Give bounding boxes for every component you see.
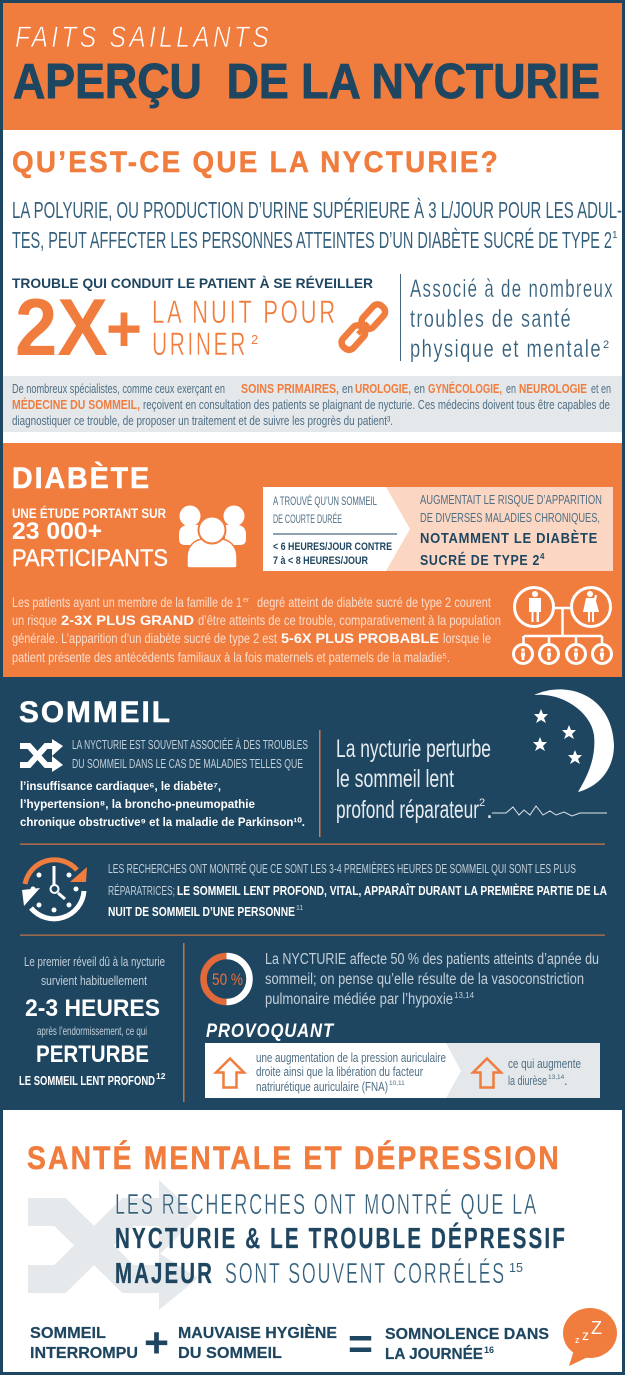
text: first awakening: après l’endormissement, ce qui xyxy=(37,1024,147,1038)
icon: clock with cycle arrows xyxy=(22,860,87,919)
text: nycturia disturbs sleep: le sommeil lent xyxy=(336,765,454,793)
text: first awakening: PERTURBE xyxy=(36,1041,149,1068)
heading: SOMMEIL xyxy=(19,696,172,729)
text: first awakening: 12 xyxy=(156,1071,166,1081)
callout: consequences xyxy=(205,1043,600,1098)
text: associated sleep disorders xyxy=(20,737,308,829)
specialists band xyxy=(3,376,622,432)
equation xyxy=(30,1319,549,1367)
text: research correlation xyxy=(115,1188,567,1290)
text: first hours of sleep: 11 xyxy=(296,905,303,912)
text: first hours of sleep: NUIT DE SOMMEIL D’UNE PERSONNE xyxy=(108,904,295,919)
icon: speech bubble zzz: z xyxy=(582,1327,589,1343)
specialists band: De nombreux spécialistes, comme ceux exerçant en xyxy=(12,381,225,396)
text: family history: lorsque le xyxy=(443,630,491,646)
definition text xyxy=(12,197,622,253)
specialists band: UROLOGIE, xyxy=(355,381,411,396)
callout: short sleep study: DE COURTE DURÉE xyxy=(273,511,342,526)
text: la nuit pour uriner: LA NUIT POUR xyxy=(152,294,338,330)
icon: moon and stars xyxy=(533,689,614,792)
specialists band: MÉDECINE DU SOMMEIL, xyxy=(12,397,140,412)
specialists band: SOINS PRIMAIRES, xyxy=(241,381,339,396)
callout: short sleep study: SUCRÉ DE TYPE 2 xyxy=(420,552,540,569)
callout: consequences: une augmentation de la pression auriculaire xyxy=(256,1050,446,1065)
text: family history: 2-3X PLUS GRAND xyxy=(61,612,194,628)
callout: consequences: 13,14 xyxy=(548,1074,565,1081)
equation: MAUVAISE HYGIÈNE xyxy=(178,1323,337,1342)
text: associé à de nombreux troubles: 2 xyxy=(603,339,609,351)
specialists band: GYNÉCOLOGIE, xyxy=(428,381,502,396)
text: family history: er xyxy=(243,597,250,604)
text: family history: d’être atteints de ce trouble, comparativement à la population xyxy=(198,612,501,628)
text: associated sleep disorders: LA NYCTURIE EST SOUVENT ASSOCIÉE À DES TROUBLES xyxy=(72,737,308,752)
stat: 23 000+ participants: PARTICIPANTS xyxy=(12,545,168,572)
big stat: 2X+: 2X xyxy=(15,283,108,373)
stat: 23 000+ participants xyxy=(12,506,168,572)
specialists band: en xyxy=(414,381,425,396)
heading: DIABÈTE xyxy=(12,461,151,495)
text: family history xyxy=(12,594,501,665)
specialists band: NEUROLOGIE xyxy=(519,381,587,396)
equation: DU SOMMEIL xyxy=(178,1345,282,1362)
specialists band: diagnostiquer ce trouble, de proposer un traitement et de suivre les progrès du patient³. xyxy=(12,413,393,428)
icon: speech bubble zzz: z xyxy=(575,1335,580,1345)
equation: LA JOURNÉE xyxy=(385,1344,483,1363)
text: sleep apnea xyxy=(265,951,599,1008)
icon: up arrow xyxy=(216,1058,244,1088)
equation: + xyxy=(144,1319,169,1366)
text: first awakening: 2-3 HEURES xyxy=(25,995,160,1022)
stat: 23 000+ participants: 23 000+ xyxy=(12,518,102,545)
callout: short sleep study: 4 xyxy=(540,552,545,561)
heading: QU’EST-CE QUE LA NYCTURIE? xyxy=(12,146,500,179)
text: nycturia disturbs sleep: . xyxy=(486,796,493,824)
text: first awakening: survient habituellement xyxy=(41,973,147,988)
icon: chain xyxy=(339,302,388,352)
callout: short sleep study: A TROUVÉ QU’UN SOMMEIL xyxy=(273,493,377,508)
panel: diabète xyxy=(3,443,622,677)
heading: SANTÉ MENTALE ET DÉPRESSION xyxy=(27,1140,561,1176)
text: associated sleep disorders: l’insuffisance cardiaque⁶, le diabète⁷, xyxy=(20,781,221,793)
specialists band: en xyxy=(506,381,516,396)
callout: consequences: 10,11 xyxy=(389,1080,405,1087)
text: family history: Les patients ayant un membre de la famille de 1 xyxy=(12,594,242,610)
callout: consequences: droite ainsi que la libération du facteur xyxy=(256,1064,424,1079)
text: family history: 5-6X PLUS PROBABLE xyxy=(281,630,439,646)
text: associé à de nombreux troubles xyxy=(410,275,614,363)
equation: SOMNOLENCE DANS xyxy=(385,1326,549,1343)
equation: 16 xyxy=(484,1345,494,1355)
definition text: 1 xyxy=(612,230,618,241)
kicker: faits saillants: FAITS SAILLANTS xyxy=(15,21,272,54)
text: research correlation: 15 xyxy=(509,1260,523,1275)
panel: santé mentale et dépression xyxy=(3,1110,622,1372)
text: la nuit pour uriner: URINER xyxy=(152,326,248,362)
callout: consequences: ce qui augmente xyxy=(508,1056,581,1071)
text: first awakening: LE SOMMEIL LENT PROFOND xyxy=(19,1073,155,1088)
stat: 23 000+ participants: UNE ÉTUDE PORTANT SUR xyxy=(12,506,166,521)
equation: SOMMEIL xyxy=(30,1325,106,1342)
callout: consequences: natriurétique auriculaire (FNA) xyxy=(256,1079,388,1094)
icon: sleep wave xyxy=(492,806,607,816)
icon: shuffle xyxy=(20,739,63,772)
big stat: 2X+: + xyxy=(106,291,142,365)
subheading: provoquant: PROVOQUANT xyxy=(206,1021,334,1042)
specialists band: et en xyxy=(591,381,611,396)
text: nycturia disturbs sleep: 2 xyxy=(479,797,485,809)
text: family history: générale. L’apparition d’un diabète sucré de type 2 est xyxy=(12,630,277,646)
donut chart: 50 % xyxy=(204,956,250,1002)
icon: shuffle watermark xyxy=(28,1180,198,1310)
icon: speech bubble zzz xyxy=(563,1308,617,1366)
text: family history: degré atteint de diabète sucré de type 2 courent xyxy=(257,594,491,610)
text: nycturia disturbs sleep: profond réparateur xyxy=(336,796,479,824)
specialists band: en xyxy=(342,381,353,396)
text: sleep apnea: 13,14 xyxy=(454,991,475,1000)
donut chart: 50 %: 50 % xyxy=(212,970,243,989)
icon: up arrow xyxy=(473,1058,501,1088)
text: research correlation: MAJEUR xyxy=(115,1258,214,1290)
text: first awakening: Le premier réveil dû à la nycturie xyxy=(24,954,165,969)
text: first awakening xyxy=(19,954,166,1088)
icon: people xyxy=(179,506,246,568)
text: nycturia disturbs sleep: La nycturie perturbe xyxy=(336,735,491,763)
icon: family tree xyxy=(514,588,612,664)
text: associated sleep disorders: DU SOMMEIL DANS LE CAS DE MALADIES TELLES QUE xyxy=(72,756,303,771)
equation: INTERROMPU xyxy=(30,1345,138,1362)
text: associated sleep disorders: l’hypertension⁸, la broncho-pneumopathie xyxy=(20,799,255,811)
text: first hours of sleep xyxy=(108,861,607,919)
text: sleep apnea: pulmonaire médiée par l’hypoxie xyxy=(265,991,453,1008)
equation: = xyxy=(348,1320,373,1367)
callout: short sleep study: NOTAMMENT LE DIABÈTE xyxy=(420,530,598,547)
icon: speech bubble zzz: Z xyxy=(591,1318,602,1338)
panel: sommeil xyxy=(19,689,614,1102)
text: first hours of sleep: RÉPARATRICES; xyxy=(108,883,175,898)
panel: header xyxy=(3,3,622,130)
text: family history: patient présente des antécédents familiaux à la fois maternels et paternels de la maladie⁵. xyxy=(12,649,450,665)
callout: consequences: la diurèse xyxy=(508,1073,547,1088)
text: associated sleep disorders: chronique obstructive⁹ et la maladie de Parkinson¹⁰. xyxy=(20,816,305,829)
callout: consequences: . xyxy=(564,1073,568,1088)
callout: short sleep study: < 6 HEURES/JOUR CONTRE xyxy=(273,541,392,553)
callout: short sleep study xyxy=(263,487,613,571)
text: family history: un risque xyxy=(12,612,57,628)
text: nycturia disturbs sleep xyxy=(336,735,493,824)
text: la nuit pour uriner xyxy=(152,294,338,362)
panel: qu'est-ce que la nycturie xyxy=(3,130,622,443)
text: la nuit pour uriner: 2 xyxy=(251,332,258,347)
subheading: trouble: TROUBLE QUI CONDUIT LE PATIENT À SE RÉVEILLER xyxy=(12,275,373,291)
callout: short sleep study: 7 à < 8 HEURES/JOUR xyxy=(273,555,368,567)
